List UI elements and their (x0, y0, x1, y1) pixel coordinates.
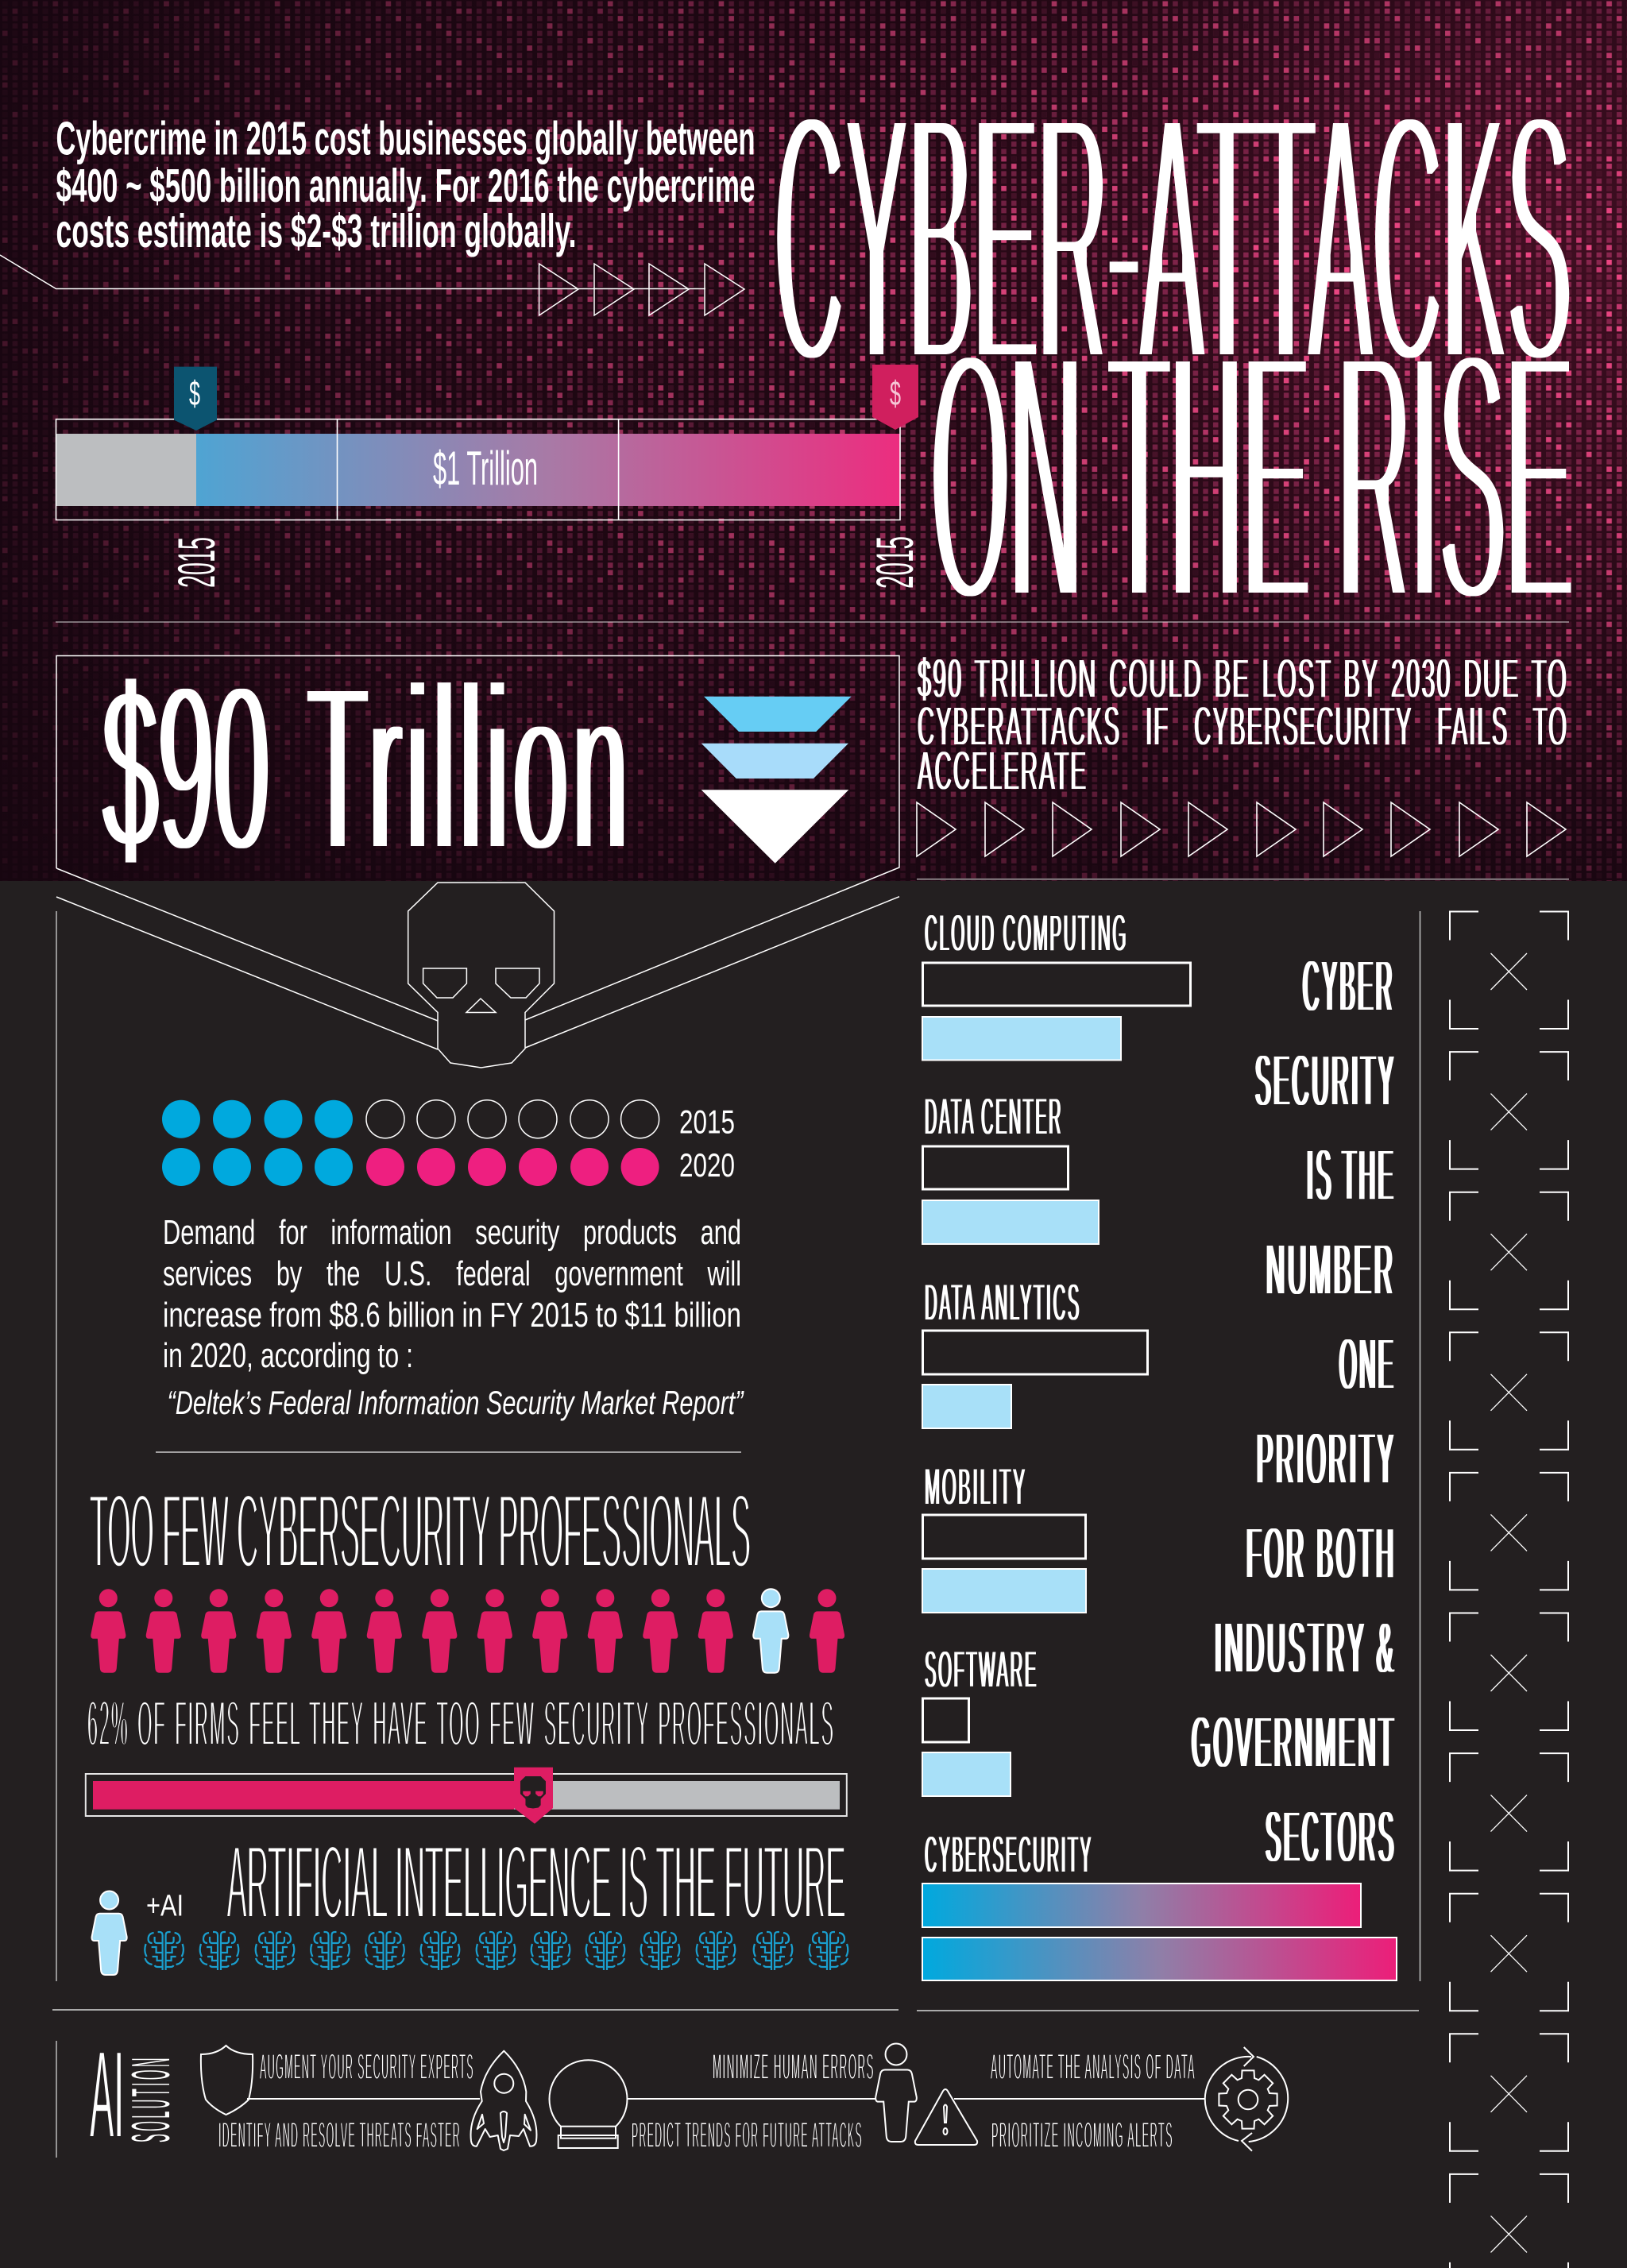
chart: sector bars: CLOUD COMPUTING (925, 903, 1128, 962)
chart: sector bars (922, 903, 1397, 1980)
text block: federal demand paragraph: increase from $8.6 billion in FY 2015 to $11 billion (163, 1296, 741, 1335)
panel outline with diagonal straps (56, 656, 899, 1981)
chart: dot comparison 2015 vs 2020 (162, 1100, 735, 1186)
icon: three descending chevrons (701, 697, 852, 864)
connector lines (247, 2098, 1205, 2100)
icon: shield (201, 2046, 253, 2115)
panel: AI solution strip: AUGMENT YOUR SECURITY EXPERTS (260, 2046, 474, 2087)
headline: $90 Trillion: $90 (102, 636, 269, 901)
icon: crystal globe (549, 2060, 628, 2148)
chart: sector bars: DATA CENTER (925, 1087, 1063, 1146)
icon: gear with cycle arrows (1205, 2047, 1288, 2151)
bar group: cybersecurity (922, 1825, 1397, 1980)
title (775, 37, 1573, 678)
text: 2015 (865, 536, 924, 589)
text block: federal demand paragraph: services by the U.S. federal government will (163, 1254, 741, 1293)
intro text block: costs estimate is $2-$3 trillion globally. (56, 205, 577, 257)
text block: federal demand paragraph: in 2020, according to : (163, 1336, 413, 1375)
text: IS THE (1307, 1134, 1396, 1216)
chart: cost progress bar (56, 419, 900, 520)
chart: dot comparison 2015 vs 2020: 2020 (679, 1146, 735, 1184)
icon: blue dollar pin: $ (189, 374, 200, 413)
bar group: software (922, 1640, 1038, 1796)
text block: federal demand paragraph: “Deltek’s Federal Information Security Market Report” (167, 1384, 744, 1421)
icon: person outline (875, 2044, 917, 2142)
text: SOLUTION (121, 2055, 181, 2142)
chart: cost progress bar: $1 Trillion (433, 442, 538, 495)
text: PRIORITIZE INCOMING ALERTS (991, 2115, 1173, 2155)
icon: rocket (471, 2051, 536, 2150)
panel: AI solution strip: IDENTIFY AND RESOLVE THREATS FASTER (218, 2115, 461, 2155)
text block: federal demand paragraph: Demand for information security products and (163, 1213, 741, 1252)
icon: pink dollar pin (872, 365, 918, 430)
text: CYBER (1303, 945, 1395, 1027)
panel: AI solution strip: PREDICT TRENDS FOR FUTURE ATTACKS (632, 2115, 863, 2155)
arrow line with triangles (0, 255, 744, 315)
icon: blue person (92, 1891, 127, 1975)
bar group: cybersecurity: CYBERSECURITY (925, 1825, 1093, 1884)
text: 2015 (167, 537, 226, 588)
chart: sector bars: DATA ANLYTICS (925, 1273, 1081, 1331)
text block: $90 trillion statement (918, 647, 1568, 802)
intro text block: $400 ~ $500 billion annually. For 2016 the cybercrime (56, 160, 755, 212)
intro text block (56, 113, 755, 257)
chart: 62 percent bar (86, 1768, 847, 1824)
panel: AI solution strip: MINIMIZE HUMAN ERRORS (713, 2046, 875, 2087)
panel: dotted magenta header background (0, 0, 1627, 881)
icon: skull outline (408, 883, 555, 1068)
bar group: mobility (922, 1457, 1086, 1613)
text block: $90 trillion statement: ACCELERATE (918, 740, 1088, 802)
icons: row of brains (145, 1932, 848, 1970)
intro text block: Cybercrime in 2015 cost businesses globally between (56, 113, 755, 165)
icon: warning triangle (915, 2089, 977, 2145)
pictogram: fourteen people (91, 1589, 844, 1673)
text: Trillion (307, 636, 632, 901)
row of outlined triangles (917, 802, 1566, 856)
decorative column: crosshair brackets (1450, 912, 1568, 2268)
chart: sector bars: SOFTWARE (925, 1640, 1038, 1698)
text block: federal demand paragraph (163, 1213, 744, 1421)
statement: right-aligned stacked words (1192, 945, 1397, 1878)
text: ONE (1339, 1323, 1396, 1405)
panel: AI solution strip (56, 2025, 1288, 2165)
bar group: cloud computing (922, 903, 1190, 1060)
text: +AI: +AI (146, 1890, 184, 1923)
icon: pink dollar pin: $ (890, 374, 901, 413)
bar group: data center (922, 1087, 1099, 1244)
bar group: mobility: MOBILITY (925, 1457, 1027, 1516)
bar group: data analytics (922, 1273, 1147, 1428)
icon: blue dollar pin (174, 367, 217, 431)
chart: dot comparison 2015 vs 2020: 2015 (679, 1103, 735, 1141)
panel: AI solution strip: AI (90, 2025, 124, 2165)
